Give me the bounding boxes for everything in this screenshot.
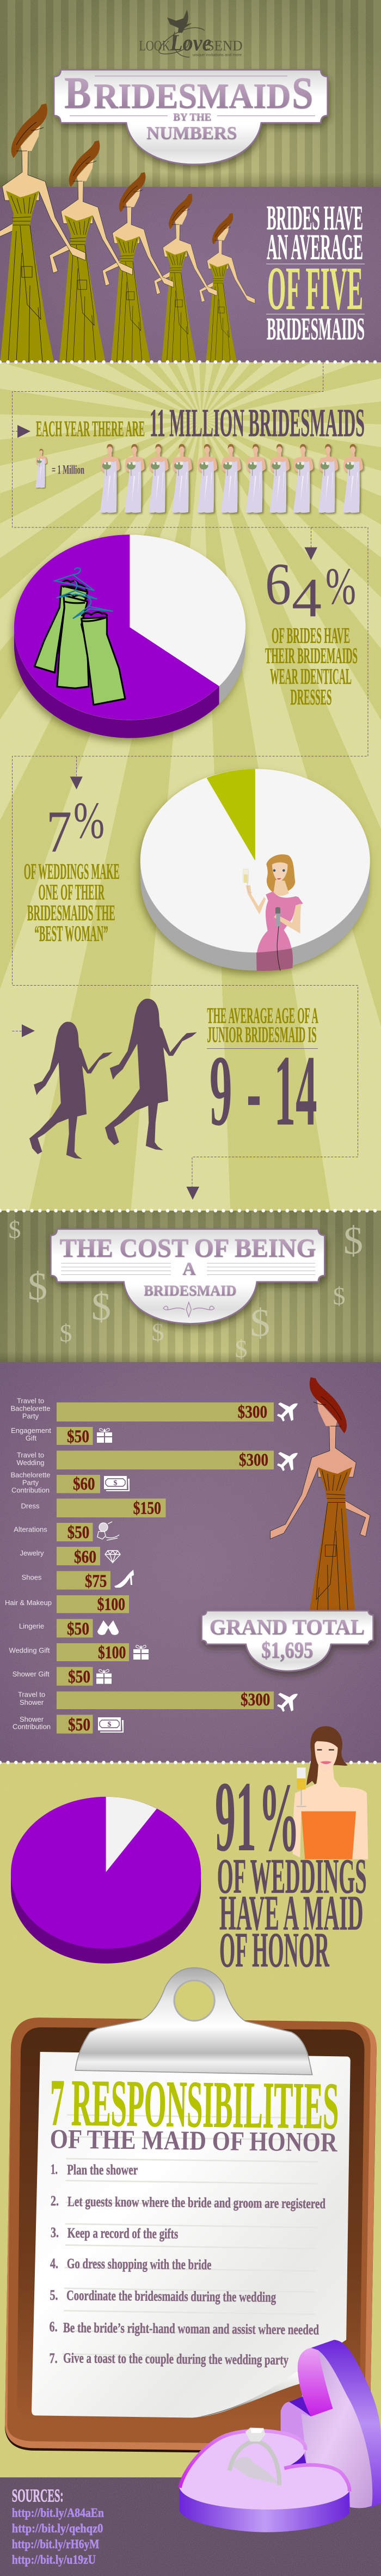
base [179,2488,349,2532]
list of responsibilities: 1. [51,2161,58,2177]
grand total plaque: $1,695 [261,1638,313,1663]
icon: lingerie [97,1620,119,1635]
sources: http://bit.ly/A84aEn [12,2506,104,2520]
icon: gift [96,1669,112,1684]
panel: cost bars purple [0,1362,381,1763]
amounts: $100 [97,1595,125,1614]
icon: gift [97,1429,112,1443]
cost plaque [51,1229,324,1323]
category labels: Bachelorette [11,1471,50,1479]
category labels: Shower [20,1715,44,1723]
bars [57,1402,274,1734]
text: brides have an average of five bridesmaids [266,198,365,347]
amounts: $300 [241,1690,270,1710]
stat: 64 percent [265,551,358,709]
icon: dove [167,10,192,33]
icon: plane [277,1452,298,1471]
paper [32,2052,351,2417]
sources: http://bit.ly/u19zU [12,2553,96,2567]
pie chart: 91 percent [11,1797,201,1964]
title text: S [292,68,313,118]
category labels: Party [22,1412,39,1420]
stat: 11 million bridesmaids [35,401,365,513]
logo: SEND [206,37,243,53]
stat: 11 million bridesmaids: EACH YEAR THERE ARE [36,416,145,441]
category labels: Contribution [13,1723,51,1731]
panel: sunburst statistics [0,362,381,1211]
icon: gift [133,1645,149,1660]
panel: cost heading stripes [0,1211,381,1362]
heading: 7 responsibilities: OF THE MAID OF HONOR [50,2123,338,2158]
sources: http://bit.ly/rH6yM [12,2537,100,2551]
legend: one figure equals one million: = 1 Million [52,463,84,476]
bar chart: cost of being a bridesmaid [5,1396,298,1735]
clipboard [5,1968,377,2454]
category labels: Contribution [11,1486,50,1494]
title text: RIDESMAID [94,76,291,116]
category labels: Travel to [18,1691,45,1699]
list of responsibilities: Go dress shopping with the bride [67,2256,212,2273]
clip [75,1968,312,2075]
stat: 64 percent: 4 [292,567,322,629]
category labels: Travel to [17,1451,44,1459]
category labels: Alterations [14,1526,47,1534]
category labels [5,1396,52,1731]
list of responsibilities: 5. [50,2287,58,2303]
illustration: maid of honor with champagne [293,1726,368,1859]
cost title text: BRIDESMAID [144,1283,236,1299]
category labels: Shoes [22,1573,42,1582]
connector arrows [12,362,368,1200]
category labels: Jewelry [20,1549,44,1557]
pie chart: 7 percent [140,769,370,970]
stat: 7 percent: 7 [46,799,72,865]
amounts: $300 [239,1450,268,1470]
list of responsibilities: Give a toast to the couple during the wedding party [63,2350,288,2368]
title text: NUMBERS [146,123,237,143]
amounts: $75 [85,1571,107,1591]
ornament [163,1302,214,1317]
list of responsibilities: 6. [50,2319,58,2335]
dollar signs: $ [250,1301,270,1345]
dollar signs: $ [343,1219,363,1262]
grand total plaque: GRAND TOTAL [210,1615,365,1639]
dollar signs [9,1216,363,1363]
amounts: $50 [67,1619,89,1639]
category labels: Wedding Gift [9,1647,50,1654]
sources: SOURCES: [12,2486,64,2506]
stat: 7 percent: ONE OF THEIR [38,879,105,904]
stat: 7 percent [24,791,120,946]
pie chart: 64 percent [14,534,245,738]
list of responsibilities: 7. [50,2350,58,2366]
title plaque [54,68,328,165]
icon: money [98,1717,124,1733]
category labels: Lingerie [19,1622,44,1630]
dollar signs: $ [9,1216,21,1243]
stat: 91 percent: % [259,1763,299,1872]
panel: maid of honor khaki [0,1763,381,2477]
amounts: $100 [98,1643,126,1663]
list of responsibilities: 2. [51,2193,59,2209]
logo: unique invitations and more [193,53,242,57]
list of responsibilities: 3. [51,2225,59,2240]
amounts: $150 [133,1499,161,1518]
illustration: heart ring box [179,2340,381,2532]
amounts: $50 [67,1427,89,1447]
icon: three green dresses on hangers [34,568,125,705]
stat: 64 percent: % [325,557,356,615]
stat: junior bridesmaid age: - [247,1035,261,1147]
amounts: $50 [68,1715,90,1735]
category labels: Dress [21,1502,40,1510]
icon row: eleven bridesmaids [100,444,363,513]
amounts: $50 [67,1523,89,1542]
title text [64,68,313,143]
cost title text [59,1233,316,1299]
silhouettes: junior bridesmaids [29,999,197,1159]
dollar signs: $ [151,1318,164,1346]
stat: junior bridesmaid age: 9 [210,1035,232,1147]
icon: shoe [114,1570,134,1588]
cost title text: THE COST OF BEING [59,1233,316,1263]
lid [302,2340,381,2507]
category labels: Gift [26,1434,36,1442]
dollar signs: $ [60,1319,72,1347]
amounts: $60 [73,1474,95,1494]
icon: plane [277,1402,298,1421]
list of responsibilities: Coordinate the bridesmaids during the wedding [66,2287,276,2305]
icon: plane [277,1693,298,1712]
illustration: five bridesmaids [0,104,255,362]
category labels: Bachelorette [11,1405,50,1413]
category labels: Shower [20,1698,44,1706]
illustration: bridesmaid in brown dress [271,1377,370,1643]
stat: 7 percent: % [73,791,105,849]
icon: money [104,1476,130,1491]
list of responsibilities: Keep a record of the gifts [67,2225,178,2241]
sources: http://bit.ly/qehqz0 [12,2522,103,2535]
category labels: Wedding [16,1459,45,1467]
text: “BEST WOMAN” [34,921,108,946]
category labels: Hair & Makeup [5,1599,52,1607]
dotted dividers [0,362,381,1763]
board [5,2018,377,2454]
grand total plaque [202,1611,373,1671]
icon: diamond [105,1551,120,1563]
dollar signs: $ [28,1265,47,1308]
cost title text: A [182,1259,196,1279]
list of responsibilities [50,2161,326,2368]
legend: one figure equals one million [35,449,84,488]
title text: BY THE [173,111,211,123]
sources [12,2486,104,2567]
panel: sources footer [0,2477,381,2576]
ring [231,2457,278,2484]
dollar signs: $ [235,1335,247,1363]
category labels: Travel to [17,1396,44,1405]
amounts [67,1402,270,1735]
logo: LOOK [139,37,170,53]
icon: sewing [97,1522,119,1540]
logo: Love [170,30,211,56]
category labels: Engagement [11,1426,51,1435]
stat: 91 percent: 91 [215,1761,256,1873]
stat: 91 percent [215,1761,367,1978]
panel: header stripes [0,0,381,187]
category labels: Party [22,1478,39,1486]
text: BRIDESMAIDS THE [27,900,115,925]
panel: five bridesmaids purple [0,187,381,362]
amounts: $300 [238,1402,267,1422]
list of responsibilities: 4. [50,2256,58,2271]
amounts: $60 [74,1547,96,1567]
illustration: woman in pink with microphone [243,854,303,971]
text: OF WEDDINGS MAKE [24,859,120,884]
list of responsibilities: Plan the shower [67,2162,138,2178]
stat: junior bridesmaid age [207,1003,318,1147]
logo [139,10,243,57]
dollar signs: $ [333,1282,345,1310]
amounts: $50 [68,1667,90,1687]
dollar signs: $ [91,1285,111,1328]
category labels: Shower Gift [13,1670,50,1678]
text: 14 [274,1035,317,1147]
title text: B [64,68,91,118]
stat: 64 percent: 6 [265,551,291,617]
